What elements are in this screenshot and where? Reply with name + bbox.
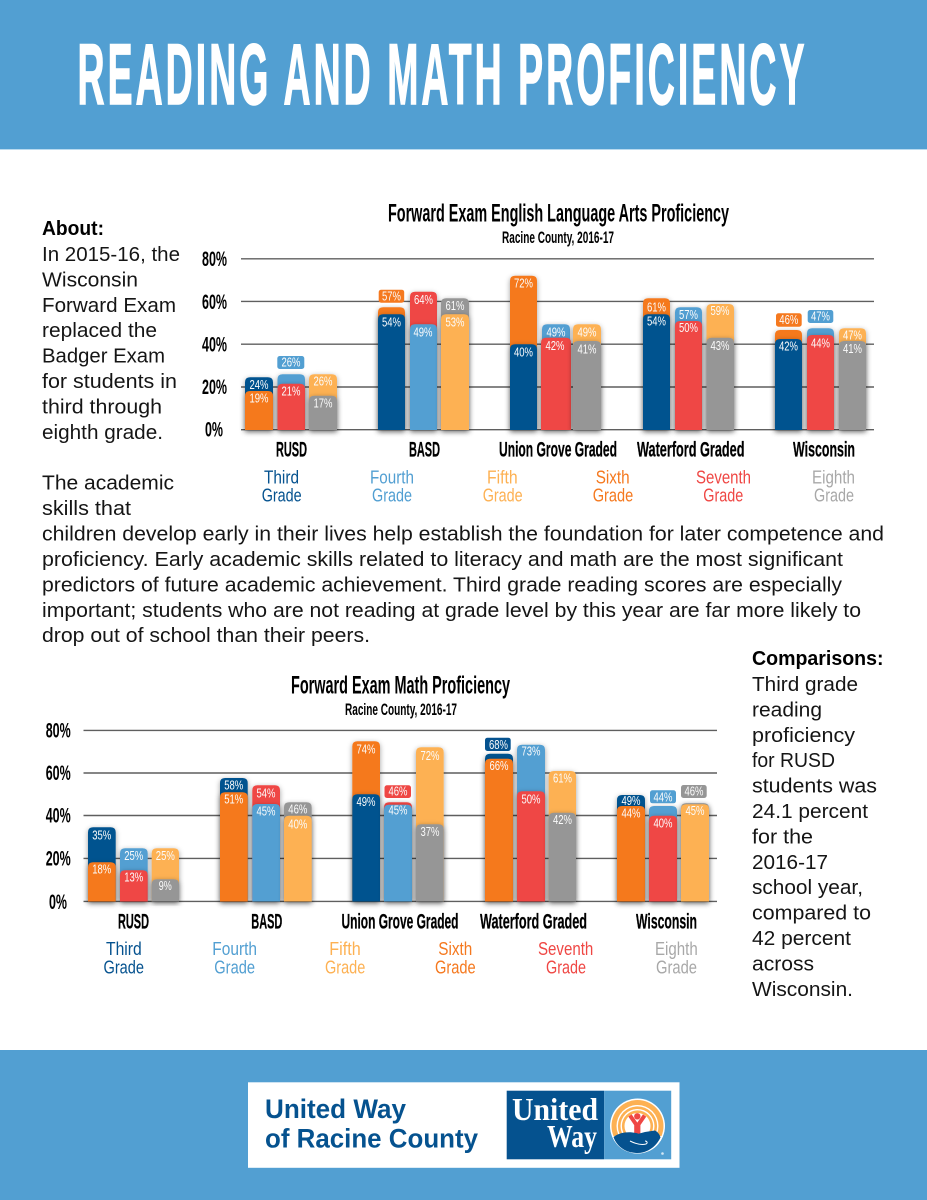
text block: about: children develop early in their lives help establish the foundation for later competence and [42,524,884,546]
legend: ELA: Grade [814,486,854,506]
bars: ELA Union Grove Graded: 42% [546,338,565,353]
category labels: math: Union Grove Graded [342,910,458,933]
y axis labels: math [46,720,71,914]
bars: math Waterford Graded: 61% [553,770,572,785]
legend: ELA: Grade [593,486,633,506]
bars: math RUSD: 25% [124,848,144,863]
chart title: math: Forward Exam Math Proficiency [291,671,510,699]
bars: math Wisconsin: 49% [622,793,641,808]
legend: ELA: Grade [262,486,302,506]
bars: ELA Wisconsin: 41% [843,341,862,356]
header band [0,0,927,150]
logo panel [248,1082,680,1168]
bars: ELA RUSD: 19% [250,391,269,406]
bars: math Waterford Graded: 42% [553,812,572,827]
bars: ELA BASD: 54% [382,315,401,330]
legend: math: Eighth [655,939,698,959]
bars: ELA Waterford Graded: 43% [710,338,730,353]
bars: math BASD [220,777,312,902]
bars: ELA Waterford Graded: 50% [679,320,698,335]
legend: ELA: Eighth [812,468,855,488]
text block: comparisons: 2016-17 [752,852,828,874]
bars: ELA Union Grove Graded: 41% [578,341,597,356]
organisation name: of Racine County [265,1123,478,1153]
bars: ELA Waterford Graded: 59% [710,303,730,318]
text block: about: The academic [42,473,174,495]
category labels: ELA: Waterford Graded [637,439,744,462]
bars: math BASD: 45% [256,803,276,818]
bars: ELA RUSD: 26% [282,355,301,370]
legend: math: Grade [325,957,365,977]
legend: ELA: Grade [703,486,743,506]
United Way wordmark [507,1091,604,1159]
y axis labels: math: 20% [46,848,71,871]
bars: ELA Union Grove Graded: 72% [514,276,533,291]
text block: about: In 2015-16, the [42,244,180,266]
bars: ELA RUSD [245,355,337,430]
text block: about: Wisconsin [42,269,138,291]
text block: about: skills that [42,498,131,520]
bars: math RUSD: 13% [124,870,144,885]
bars: ELA Waterford Graded: 54% [647,314,666,329]
y axis labels: ELA: 20% [202,376,227,399]
bars: ELA BASD: 64% [414,292,433,307]
bars: math RUSD: 9% [159,878,172,893]
text block: comparisons: 42 percent [752,928,851,950]
footer band [0,1050,927,1200]
bars: math Union Grove Graded: 74% [356,741,376,756]
legend: ELA: Grade [483,486,523,506]
bars: math BASD: 58% [224,777,244,792]
y axis labels: math: 80% [46,720,71,743]
text block: about: eighth grade. [42,422,163,444]
bars: ELA BASD [378,288,469,430]
legend: math: Fifth [329,939,361,959]
legend: ELA: Third [264,468,299,488]
category labels: ELA: RUSD [276,439,307,462]
text block: about: drop out of school than their peers. [42,625,370,647]
y axis labels: math: 0% [49,891,67,914]
bars: ELA Wisconsin: 44% [811,335,830,350]
bars: ELA Union Grove Graded: 49% [546,325,566,340]
text block: comparisons: across [752,953,814,975]
bars: math BASD: 46% [288,801,308,816]
bars: ELA BASD: 57% [382,288,401,303]
text block: comparisons: proficiency [752,725,855,747]
bars: math Wisconsin: 45% [686,803,705,818]
text block: about: predictors of future academic achievement. Third grade reading scores are especially [42,574,842,596]
bars: ELA RUSD: 17% [314,396,333,411]
text block: comparisons: for RUSD [752,750,835,772]
text block: comparisons: compared to [752,903,871,925]
category labels: math: Waterford Graded [480,910,587,933]
bars: ELA Union Grove Graded [510,276,601,430]
bars: math Union Grove Graded: 37% [420,824,440,839]
text block: about [42,218,884,647]
text block: comparisons: reading [752,699,822,721]
bars: math Union Grove Graded: 46% [388,784,408,799]
bars: math BASD: 51% [224,791,244,806]
legend: math: Fourth [212,939,257,959]
text block: about: About: [42,218,104,240]
bars: math Waterford Graded: 68% [489,737,508,752]
bars: ELA Union Grove Graded: 49% [578,325,597,340]
bars: math RUSD [88,827,179,902]
bars: math Union Grove Graded [352,741,444,902]
bars: ELA Wisconsin: 47% [811,309,830,324]
organisation name [265,1094,478,1153]
legend: math: Grade [104,957,144,977]
bars: ELA Wisconsin: 42% [779,339,798,354]
bars: ELA Waterford Graded [643,298,734,430]
chart: Math proficiency [46,671,717,977]
bars: ELA Wisconsin: 47% [843,327,862,342]
legend: ELA: Sixth [596,468,630,488]
text block: about: important; students who are not reading at grade level by this year are far more likely to [42,600,861,622]
bars: math BASD: 54% [256,785,276,800]
bars: ELA Union Grove Graded: 40% [514,345,533,360]
text block: about: Forward Exam [42,295,176,317]
text block: comparisons: for the [752,826,813,848]
y axis labels: ELA: 40% [202,334,227,357]
text block: comparisons: students was [752,776,877,798]
category labels: math: Wisconsin [636,910,697,933]
text block: about: third through [42,396,162,418]
legend: math: Grade [546,957,586,977]
legend: math: Seventh [538,939,593,959]
category labels: ELA: Wisconsin [793,439,855,462]
legend: ELA: Grade [372,486,412,506]
category labels: math: RUSD [118,910,149,933]
text block: comparisons: Third grade [752,674,858,696]
United Way wordmark: Way [547,1118,597,1154]
United Way wordmark: United [512,1091,598,1127]
bars: ELA BASD: 53% [446,315,465,330]
text block: comparisons: school year, [752,877,863,899]
category labels: ELA: BASD [409,439,440,462]
bars: math RUSD: 25% [156,848,175,863]
bars: math Wisconsin: 40% [654,815,673,830]
chart: English Language Arts proficiency [202,200,874,506]
text block: about: for students in [42,371,177,393]
bars: ELA Wisconsin: 46% [779,312,799,327]
bars: math Waterford Graded: 73% [522,744,541,759]
legend: math: Grade [435,957,476,977]
legend: math: Grade [656,957,697,977]
text block: comparisons: Wisconsin. [752,979,853,1001]
bars: math Union Grove Graded: 45% [388,802,408,817]
bars: ELA RUSD: 24% [250,377,269,392]
bars: math Wisconsin [617,784,709,902]
organisation name: United Way [265,1094,406,1124]
legend: ELA [262,468,855,506]
legend: ELA: Fourth [370,468,414,488]
bars: math Wisconsin: 44% [622,805,641,820]
y axis labels: ELA: 60% [202,291,227,314]
y axis labels: math: 40% [46,805,71,828]
bars: math Union Grove Graded: 72% [420,748,440,763]
y axis labels: math: 60% [46,762,71,785]
bars: math Waterford Graded: 66% [490,758,509,773]
text block: about: Badger Exam [42,346,165,368]
category labels: math [118,910,697,933]
legend: math: Sixth [438,939,472,959]
bars: math Wisconsin: 44% [654,789,673,804]
bars: math Union Grove Graded: 49% [356,794,376,809]
bars: ELA RUSD: 21% [282,384,301,399]
legend: math: Third [106,939,142,959]
text block: about: replaced the [42,320,157,342]
icon: United Way emblem [604,1091,671,1159]
bars: math BASD: 40% [288,816,308,831]
text block: comparisons [752,648,884,1001]
legend: ELA: Seventh [696,468,751,488]
chart subtitle: ELA: Racine County, 2016-17 [502,228,614,247]
bars: ELA BASD: 49% [414,325,433,340]
legend: math: Grade [214,957,255,977]
category labels: math: BASD [251,910,282,933]
bars: ELA BASD: 61% [446,298,465,313]
text block: comparisons: Comparisons: [752,648,884,670]
category labels: ELA [276,439,855,462]
bars: ELA Waterford Graded: 57% [679,307,698,322]
bars: math RUSD: 18% [92,861,112,876]
bars: ELA Waterford Graded: 61% [647,300,666,315]
bars: ELA Wisconsin [775,309,866,430]
legend: math [104,939,698,977]
bars: math Wisconsin: 46% [684,784,704,799]
chart subtitle: math: Racine County, 2016-17 [345,700,457,719]
y axis labels: ELA: 0% [205,419,223,442]
legend: ELA: Fifth [487,468,518,488]
bars: math Waterford Graded: 50% [522,791,541,806]
category labels: ELA: Union Grove Graded [499,439,617,462]
text block: about: proficiency. Early academic skills related to literacy and math are the most significant [42,549,843,571]
bars: ELA RUSD: 26% [314,374,333,389]
text block: comparisons: 24.1 percent [752,801,868,823]
bars: math Waterford Graded [485,737,576,902]
y axis labels: ELA: 80% [202,248,227,271]
bars: math RUSD: 35% [92,827,112,842]
y axis labels: ELA [202,248,227,442]
